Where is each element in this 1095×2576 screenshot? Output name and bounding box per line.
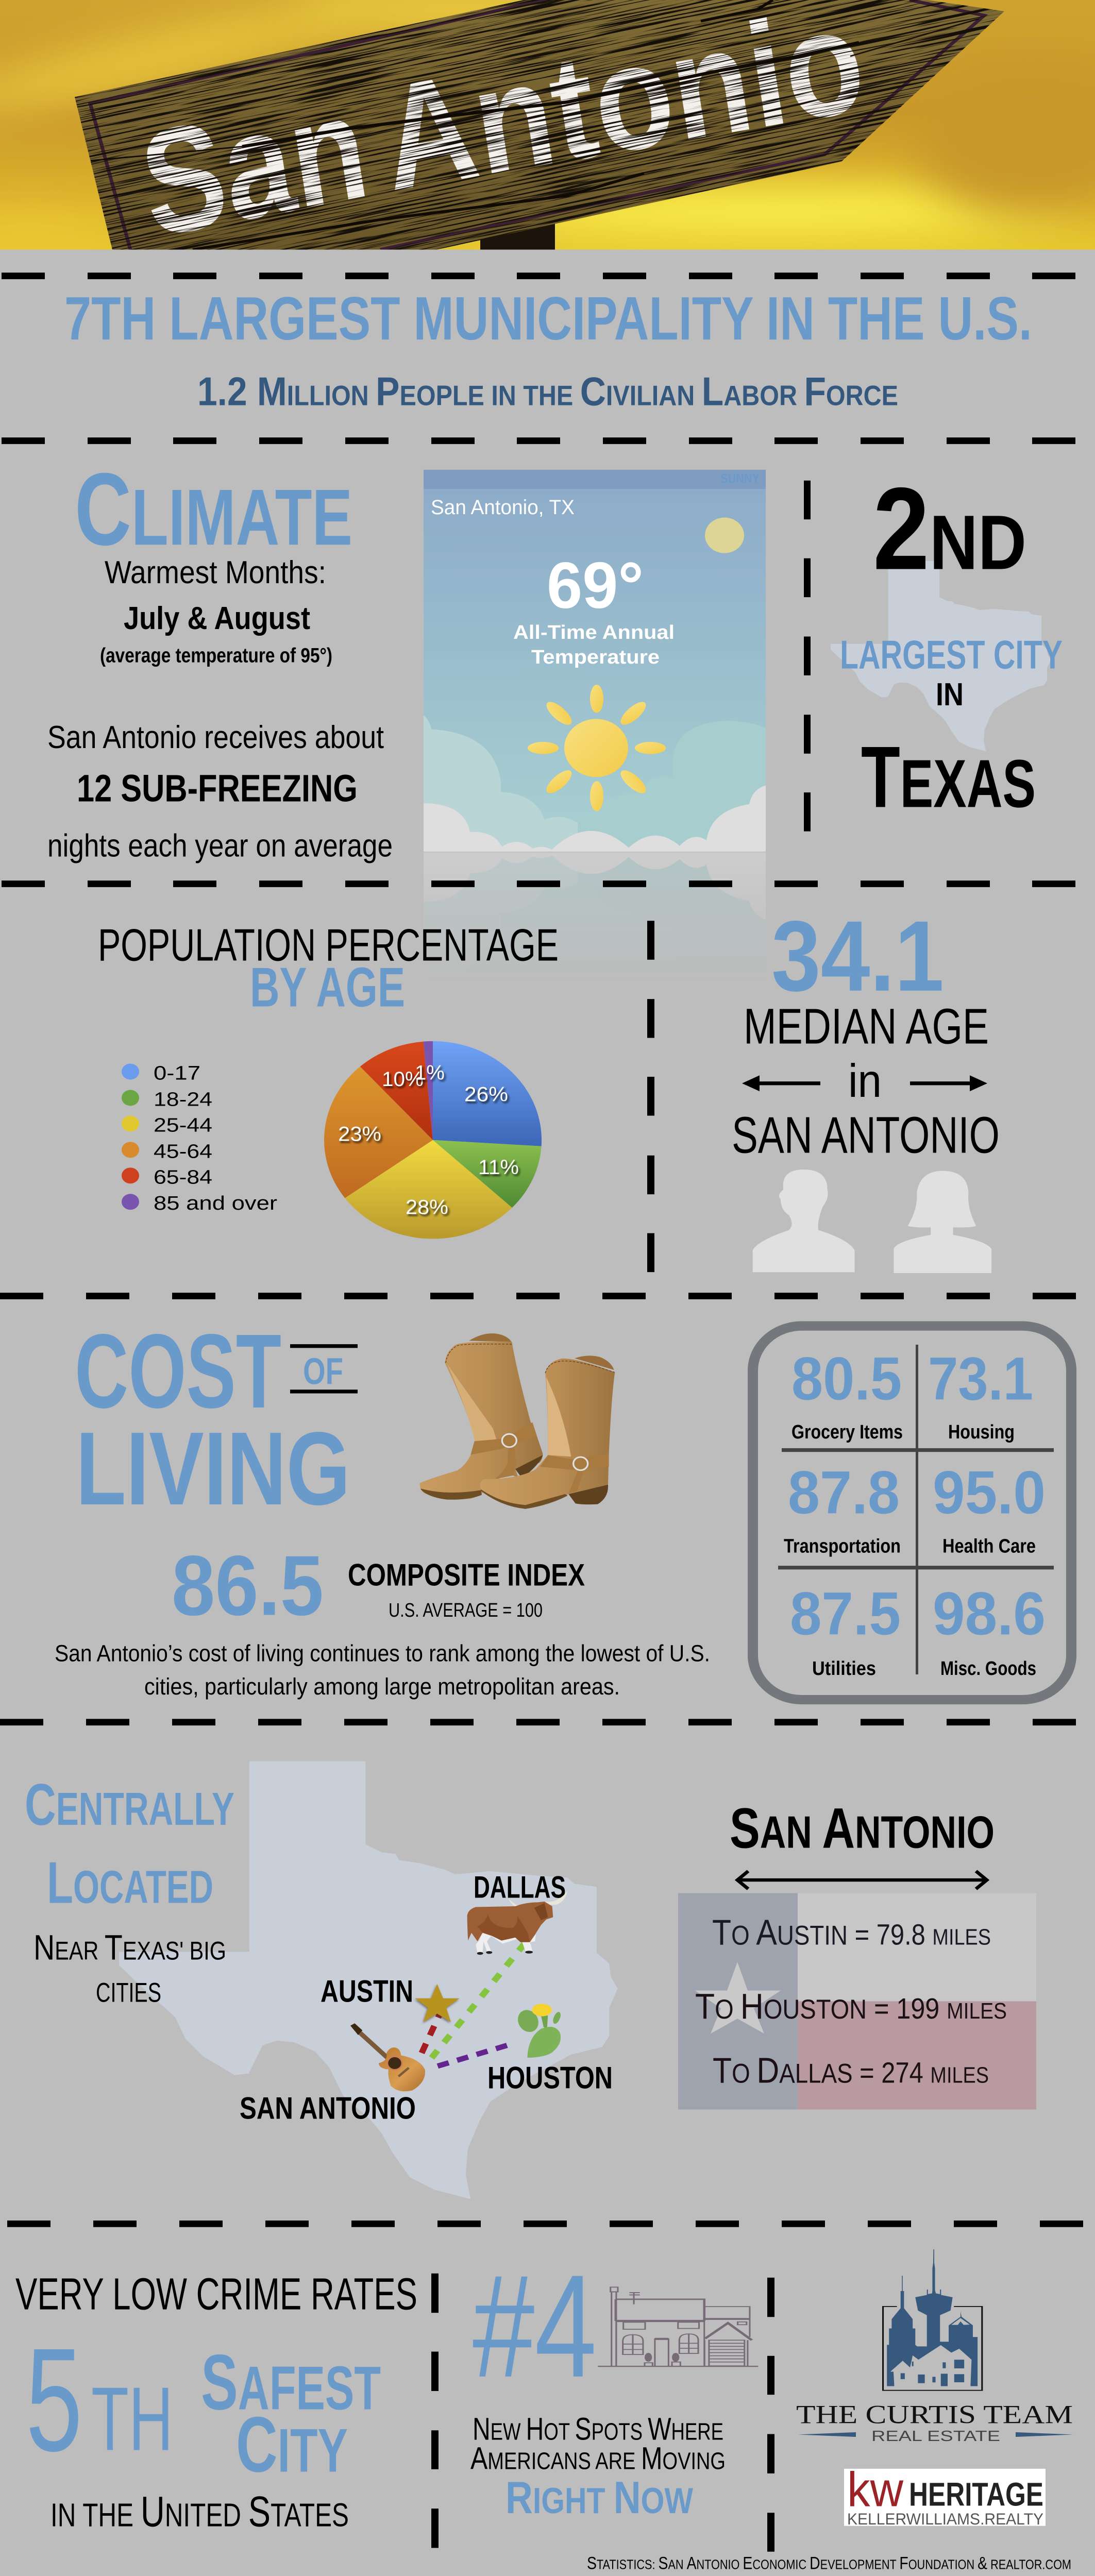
description <box>55 1641 710 1700</box>
utilities <box>790 1580 901 1679</box>
pie chart: 26% <box>464 1082 508 1106</box>
arrow: double-headed <box>737 1871 987 1889</box>
heading: SAN ANTONIO <box>730 1796 995 1860</box>
arrow: left <box>742 1075 820 1091</box>
wooden sign board <box>75 0 1004 249</box>
route: to Houston <box>437 2044 510 2066</box>
city label: Houston: HOUSTON <box>487 2061 613 2095</box>
housing <box>928 1345 1033 1443</box>
Keller Williams Heritage logo: HERITAGE <box>909 2477 1043 2513</box>
pie chart: 23% <box>338 1122 381 1145</box>
subheading: NEAR TEXAS' BIG <box>33 1928 226 1968</box>
heading: of <box>290 1344 358 1394</box>
panel: cost of living <box>55 1312 1071 1700</box>
grocery items: 80.5 <box>791 1345 902 1413</box>
logo skyline <box>883 2249 982 2391</box>
dashed divider: location top <box>0 1719 1076 1725</box>
panel: distances from San Antonio <box>678 1796 1036 2110</box>
heading line 2: BY AGE <box>250 957 405 1019</box>
arrow: right <box>910 1075 987 1091</box>
sign post <box>480 224 555 249</box>
moon <box>705 518 744 553</box>
right now: RIGHT NOW <box>506 2472 694 2523</box>
icon: house line drawing <box>598 2287 758 2366</box>
panel: population by age <box>98 920 559 1239</box>
route: to Austin <box>422 2012 441 2053</box>
misc goods: 98.6 <box>933 1580 1046 1648</box>
panel: climate <box>47 452 393 863</box>
pie chart: 10% <box>382 1067 424 1091</box>
description: San Antonio’s cost of living continues to rank among the lowest of U.S. <box>55 1641 710 1667</box>
icon: sun <box>528 685 666 811</box>
hot spots line 2: AMERICANS ARE MOVING <box>470 2441 726 2476</box>
heading: of: OF <box>303 1351 343 1393</box>
housing: Housing <box>948 1421 1015 1443</box>
health care: 95.0 <box>933 1459 1046 1527</box>
composite index value: 86.5 <box>172 1538 324 1633</box>
transportation: Transportation <box>784 1535 901 1557</box>
real estate strapline: REAL ESTATE <box>871 2428 1000 2445</box>
panel: safety <box>15 2269 417 2536</box>
median age value: 34.1 <box>771 901 944 1012</box>
misc goods <box>933 1580 1046 1679</box>
sub-freezing value: 12 SUB-FREEZING <box>77 767 358 810</box>
sub-freezing intro: San Antonio receives about <box>47 719 384 755</box>
chart legend: 45-64 <box>154 1140 212 1162</box>
5th: 5 <box>26 2317 82 2482</box>
wood grain <box>75 0 1004 249</box>
map: Texas silhouette <box>831 561 1051 751</box>
chart legend <box>122 1062 277 1214</box>
description: cities, particularly among large metropolitan areas. <box>144 1674 620 1700</box>
golden sky <box>0 0 1095 258</box>
in: in <box>848 1055 882 1107</box>
icon: cowboy boots <box>420 1333 615 1509</box>
median age label: MEDIAN AGE <box>744 998 989 1054</box>
city label: Austin: AUSTIN <box>321 1974 413 2009</box>
average temperature note: (average temperature of 95°) <box>100 643 332 667</box>
dashed vertical divider: population <box>647 921 654 1272</box>
dashed vertical divider: hot spots <box>767 2278 774 2552</box>
icon: man silhouette <box>753 1170 855 1272</box>
safest: SAFEST <box>201 2338 381 2427</box>
health care <box>933 1459 1046 1557</box>
subheading <box>33 1928 226 2008</box>
U.S. average note: U.S. AVERAGE = 100 <box>389 1599 543 1621</box>
hot spots line 1: NEW HOT SPOTS WHERE <box>473 2411 723 2447</box>
route: to Dallas <box>431 1943 525 2058</box>
panel: hot spots <box>470 2245 758 2523</box>
distance: Dallas: TO DALLAS = 274 MILES <box>713 2050 989 2091</box>
panel: centrally located <box>25 1761 618 2199</box>
chart legend: 0-17 <box>154 1062 200 1084</box>
panel: median age <box>732 901 1000 1273</box>
pie chart: 11% <box>478 1156 519 1179</box>
city: CITY <box>236 2401 348 2489</box>
transportation: 87.8 <box>788 1459 900 1527</box>
pie chart <box>324 1041 542 1239</box>
chart legend: 65-84 <box>154 1166 212 1188</box>
composite index label: COMPOSITE INDEX <box>348 1558 585 1592</box>
icon: woman silhouette <box>894 1171 991 1273</box>
health care: Health Care <box>942 1535 1036 1557</box>
chart legend: 25-44 <box>154 1114 212 1136</box>
icon: longhorn <box>467 1891 568 1955</box>
transportation <box>784 1459 901 1557</box>
real estate strapline <box>798 2428 1073 2445</box>
Keller Williams Heritage logo: kw <box>847 2463 904 2517</box>
panel: weather app reflection <box>424 853 766 910</box>
warmest months value: July & August <box>124 600 310 636</box>
dashed dividers <box>2 273 1075 444</box>
dashed vertical divider: climate <box>804 481 811 832</box>
5th <box>26 2317 173 2482</box>
sub-freezing outro: nights each year on average <box>47 828 393 863</box>
icon: guitar <box>350 2023 425 2091</box>
status label: SUNNY <box>720 471 760 486</box>
team name: THE CURTIS TEAM <box>796 2400 1073 2429</box>
Keller Williams Heritage logo: KELLERWILLIAMS.REALTY <box>847 2510 1043 2529</box>
pie chart: 1% <box>415 1061 445 1084</box>
panel: second largest city <box>831 463 1063 826</box>
utilities: 87.5 <box>790 1580 901 1648</box>
icon: star <box>415 1984 460 2022</box>
panel: The Curtis Team logo <box>796 2249 1073 2529</box>
source note: STATISTICS: SAN ANTONIO ECONOMIC DEVELOPMENT FOUNDATION & REALTOR.COM <box>587 2553 1071 2573</box>
map: Texas <box>119 1761 618 2199</box>
temperature caption line 2: Temperature <box>531 646 660 668</box>
chart legend: 18-24 <box>154 1088 212 1110</box>
Texas flag <box>678 1893 1036 2110</box>
distance: Houston: TO HOUSTON = 199 MILES <box>695 1986 1007 2026</box>
city label: Dallas: DALLAS <box>474 1870 566 1905</box>
hero: wooden San Antonio sign <box>0 0 1095 249</box>
Keller Williams Heritage logo <box>844 2463 1046 2529</box>
sign title: San: San <box>131 62 377 269</box>
temperature caption line 1: All-Time Annual <box>513 621 675 643</box>
location: San Antonio, TX <box>431 496 575 519</box>
heading: cost: COST <box>75 1312 281 1430</box>
dashed divider: population top <box>2 880 1075 887</box>
utilities: Utilities <box>812 1657 876 1679</box>
distance: Austin: TO AUSTIN = 79.8 MILES <box>712 1912 991 1953</box>
housing: 73.1 <box>928 1345 1033 1413</box>
crime rates heading: VERY LOW CRIME RATES <box>15 2269 417 2319</box>
icon: cactus <box>515 2004 562 2058</box>
dashed vertical divider: safety <box>431 2274 439 2548</box>
dashed divider: cost of living top <box>0 1293 1076 1299</box>
misc goods: Misc. Goods <box>940 1657 1036 1679</box>
chart legend: 85 and over <box>154 1192 277 1214</box>
grocery items <box>791 1345 903 1443</box>
panel: weather app card <box>424 470 766 853</box>
heading: living: LIVING <box>76 1410 350 1527</box>
grocery items: Grocery Items <box>791 1421 903 1443</box>
2nd: 2ND <box>873 463 1026 594</box>
dashed divider: bottom section top <box>7 2221 1083 2227</box>
pie chart: 28% <box>406 1195 448 1218</box>
subheading: CITIES <box>96 1977 161 2008</box>
climate heading: CLIMATE <box>75 452 352 567</box>
subheading: civilian labor force: 1.2 MILLION PEOPLE IN THE CIVILIAN LABOR FORCE <box>197 369 898 414</box>
in: IN <box>936 676 964 712</box>
panel: cost index table <box>753 1326 1071 1700</box>
in the United States: IN THE UNITED STATES <box>50 2487 349 2536</box>
warmest months label: Warmest Months: <box>105 554 326 590</box>
heading line 1: POPULATION PERCENTAGE <box>98 920 559 971</box>
temperature: 69° <box>547 549 644 622</box>
#4: #4 <box>473 2245 597 2408</box>
heading: located: LOCATED <box>47 1850 213 1916</box>
heading: centrally: CENTRALLY <box>25 1771 234 1838</box>
city label: San Antonio: SAN ANTONIO <box>240 2091 416 2126</box>
5th: TH <box>91 2369 173 2470</box>
clouds <box>424 715 766 853</box>
